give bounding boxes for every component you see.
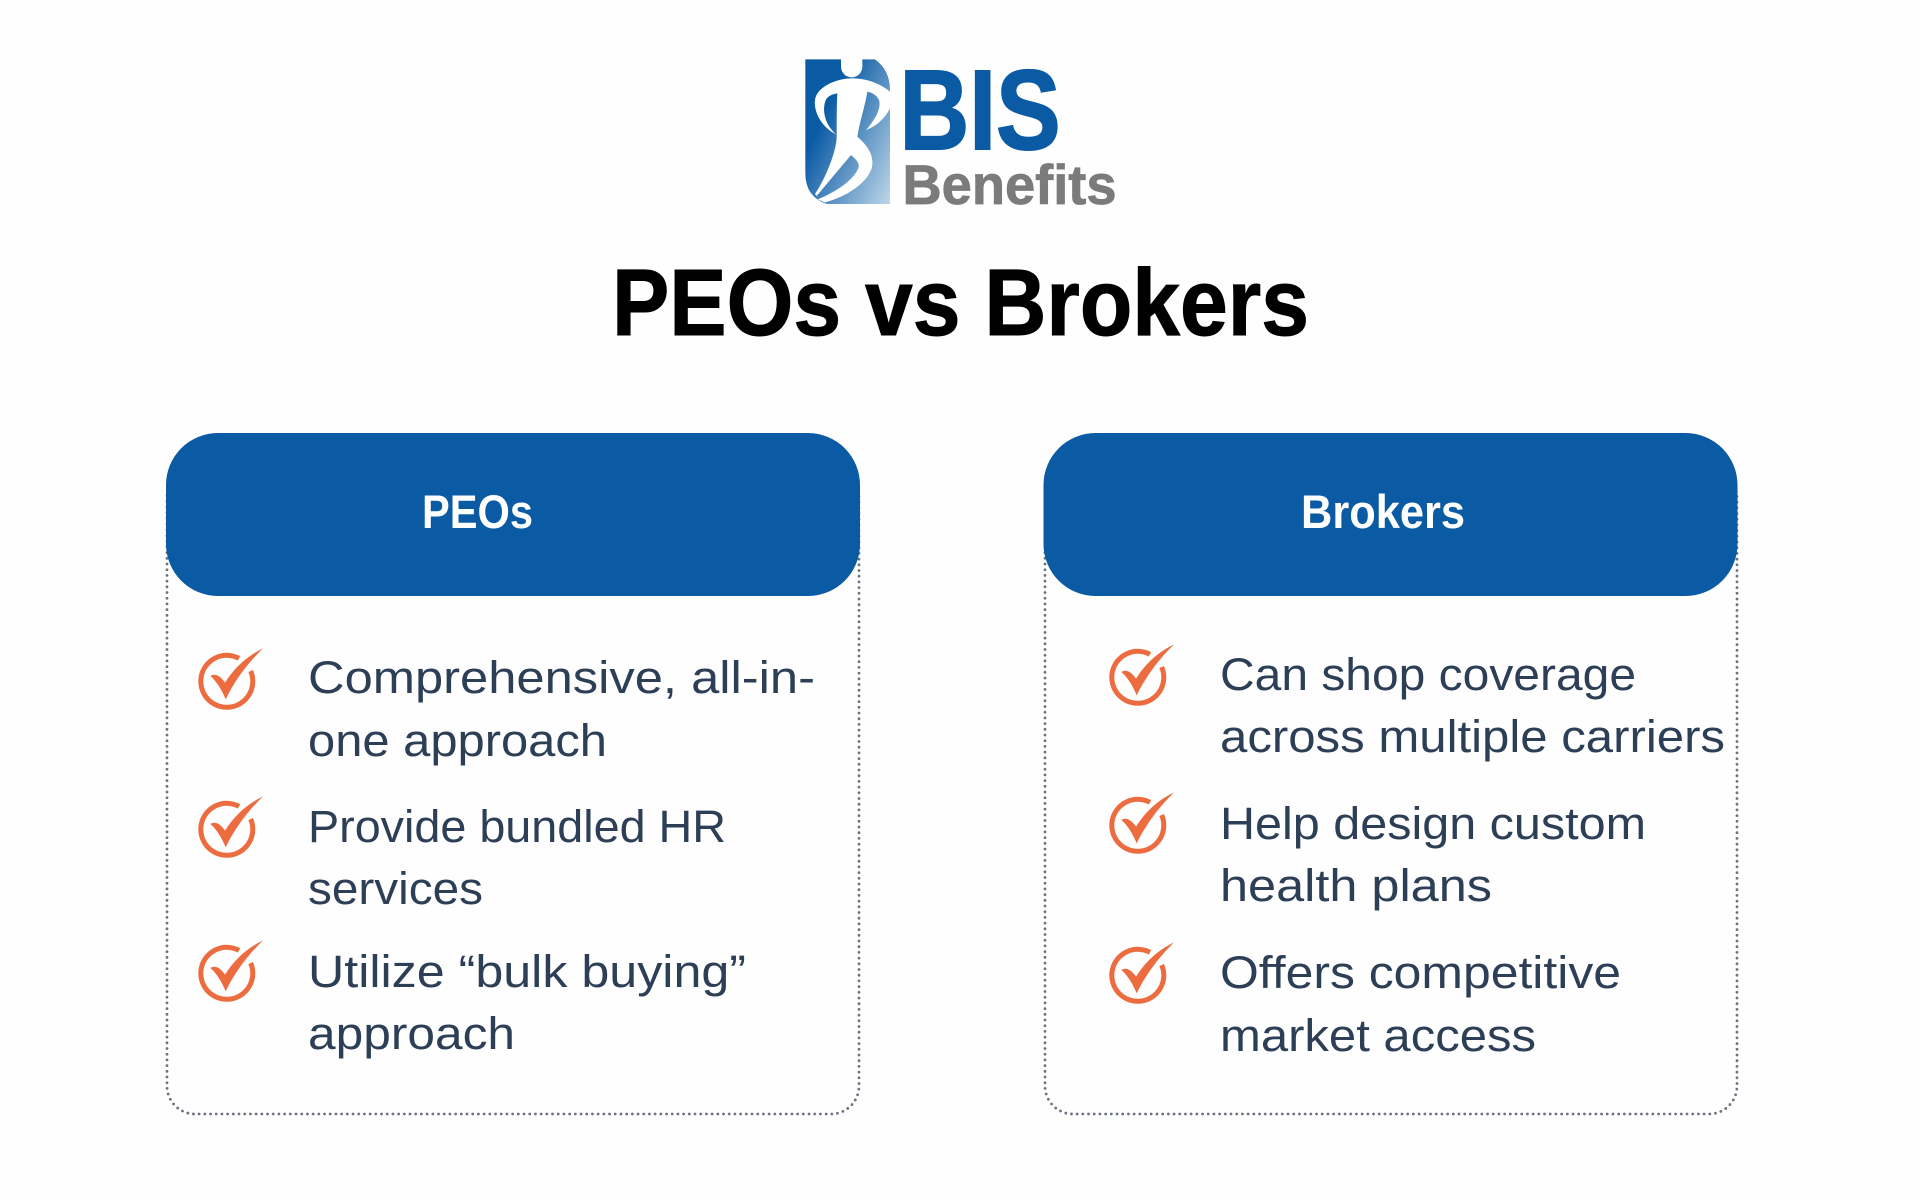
icon: check 2: [1112, 792, 1174, 851]
icon: check 3: [1112, 942, 1174, 1001]
text: bundled HR: services: [308, 863, 483, 914]
panel: PEOs: [166, 433, 860, 1114]
title: PEOs vs Brokers: [612, 250, 1309, 356]
text: bulk buying: approach: [308, 1008, 515, 1059]
text: shop coverage: Can shop coverage: [1220, 649, 1636, 700]
text: shop coverage: [1220, 649, 1725, 762]
text: comprehensive: one approach: [308, 715, 607, 766]
text: custom health plans: health plans: [1220, 860, 1492, 911]
dotted panel outline: [167, 470, 859, 1114]
text: comprehensive: [308, 652, 815, 766]
logo wordmark: Benefits: Benefits: [902, 153, 1116, 216]
text: custom health plans: [1220, 798, 1646, 911]
text: bundled HR: Provide bundled HR: [308, 801, 726, 852]
dotted panel outline: [1045, 470, 1737, 1114]
icon: check 1: [1112, 644, 1174, 703]
icon: runner shield: [805, 56, 890, 204]
heading: PEOs: PEOs: [422, 485, 533, 538]
text: bulk buying: Utilize “bulk buying”: [308, 946, 746, 997]
text: competitive market: [1220, 947, 1621, 1061]
text: competitive market: Offers competitive: [1220, 947, 1621, 998]
text: shop coverage: across multiple carriers: [1220, 711, 1725, 762]
text: custom health plans: Help design custom: [1220, 798, 1646, 849]
panel header bar: [166, 433, 860, 596]
icon: check 2: [201, 796, 263, 855]
icon: check 3: [201, 940, 263, 999]
logo wordmark: BIS: BIS: [900, 47, 1060, 173]
panel header bar: [1044, 433, 1738, 596]
panel: Brokers: [1044, 433, 1738, 1114]
text: bundled HR: [308, 801, 726, 914]
text: comprehensive: Comprehensive, all-in-: [308, 652, 815, 703]
icon: check 1: [201, 648, 263, 707]
text: bulk buying: [308, 946, 746, 1059]
logo: BIS Benefits: [805, 47, 1116, 216]
heading: Brokers: Brokers: [1301, 485, 1465, 538]
text: competitive market: market access: [1220, 1010, 1536, 1061]
